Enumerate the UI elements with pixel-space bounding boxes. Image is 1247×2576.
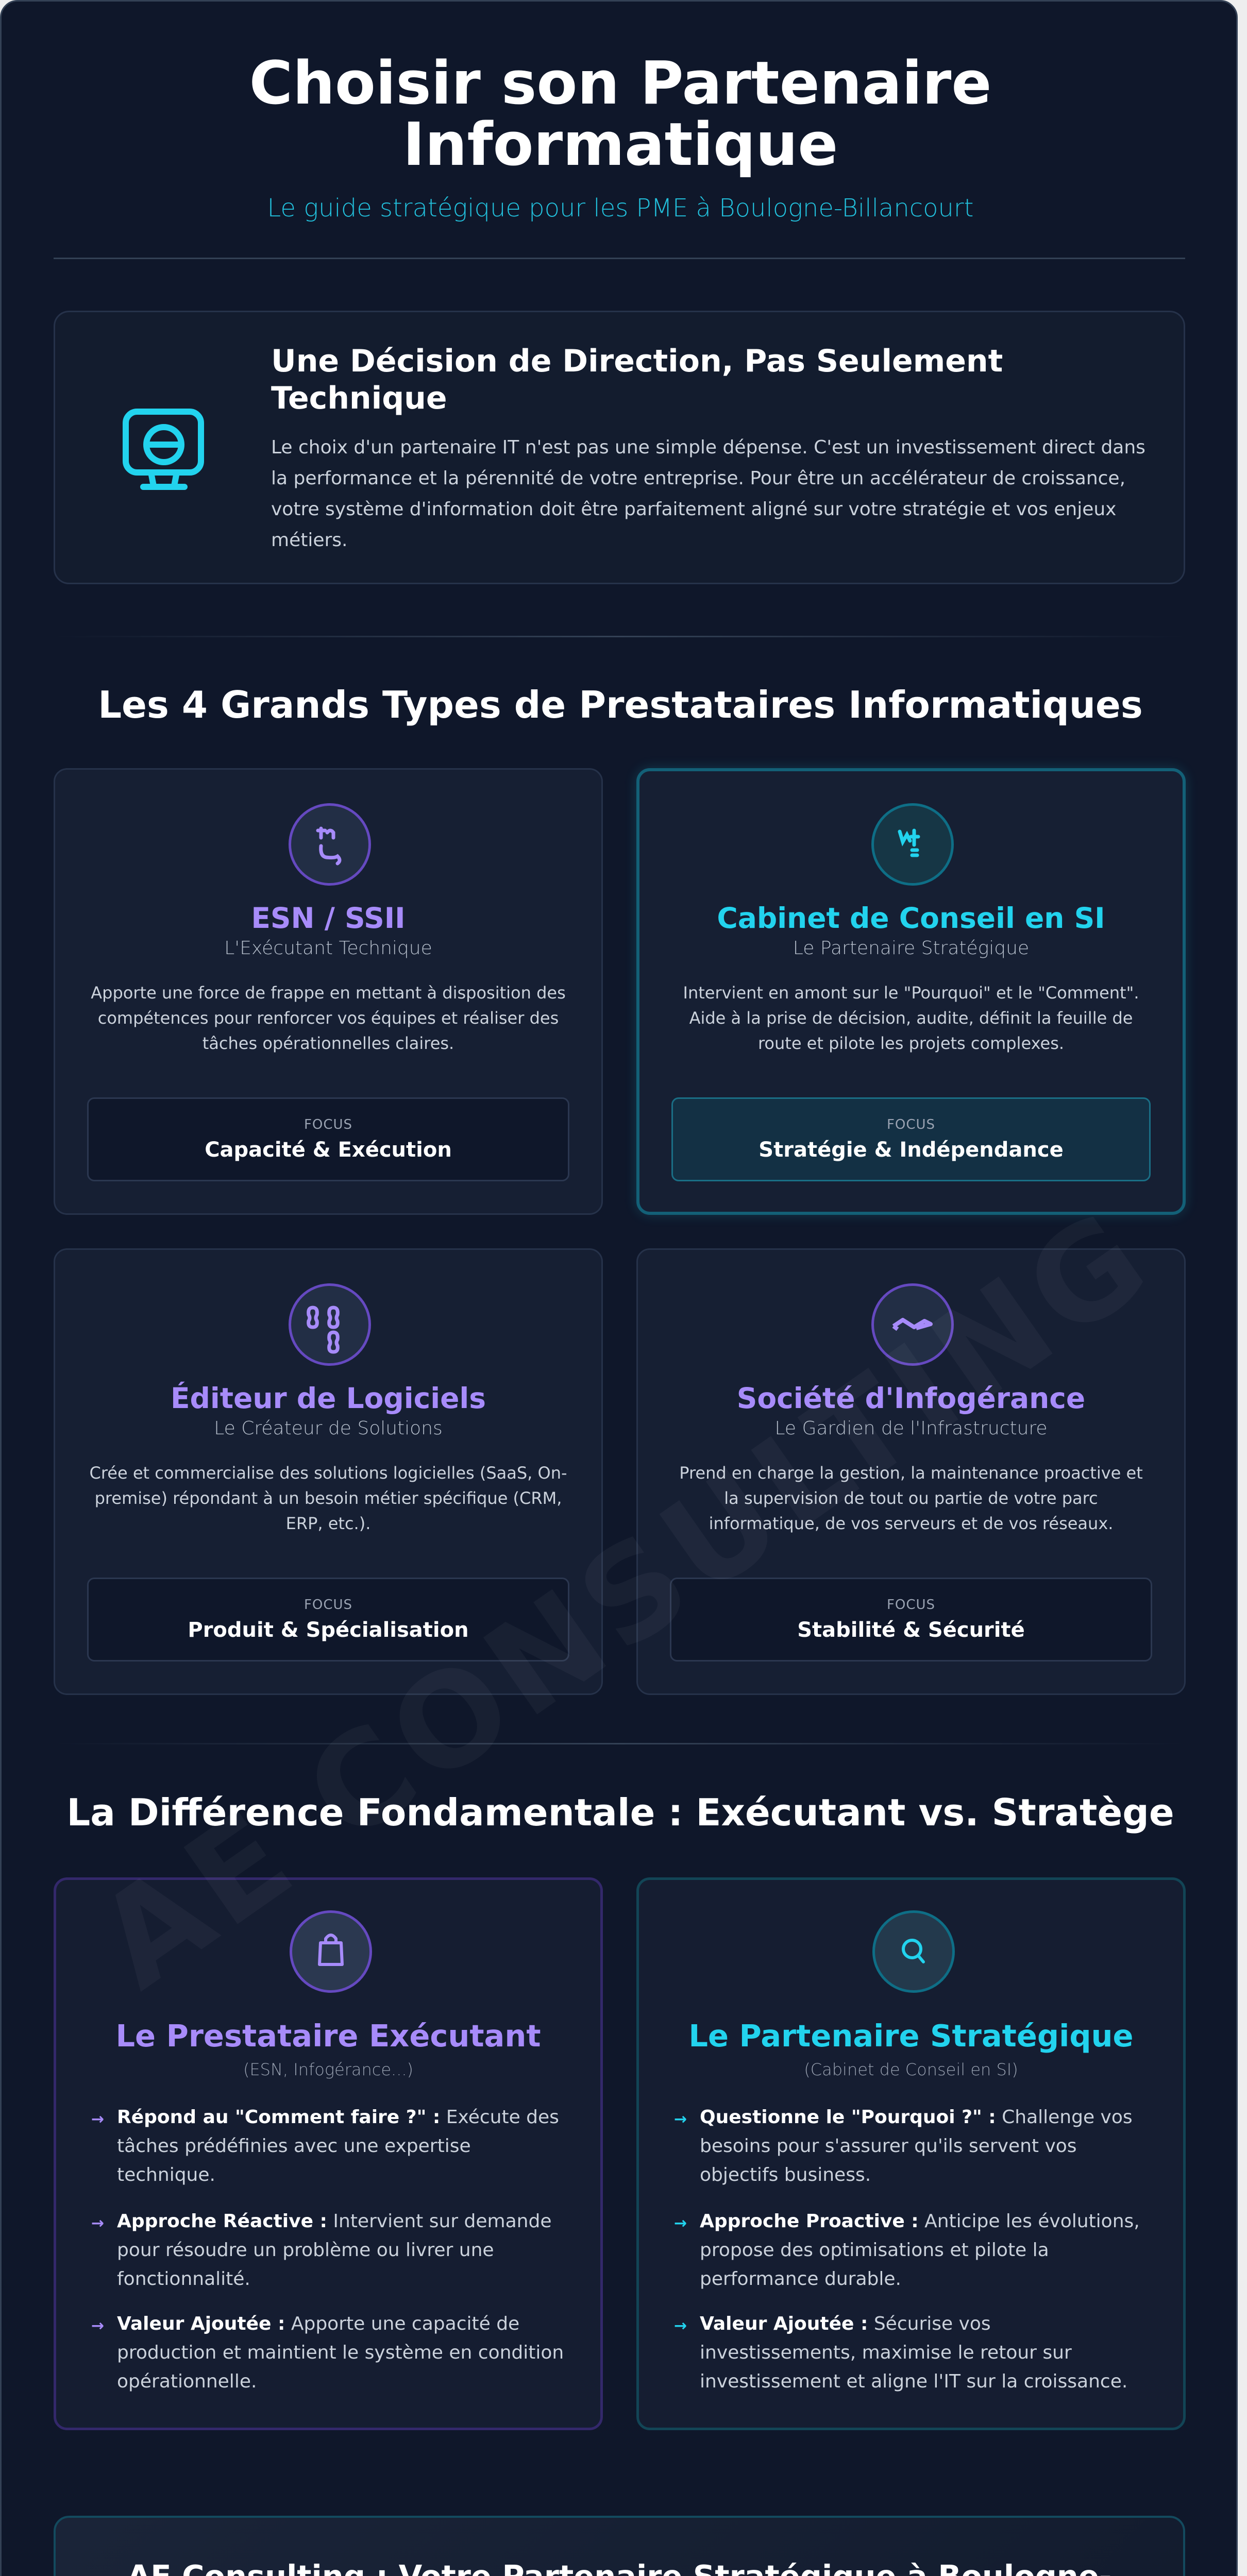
focus box: FOCUS: [887, 1117, 935, 1132]
card: Cabinet de conseil: Cabinet de Conseil en SI: [717, 902, 1105, 935]
focus box: [671, 1097, 1151, 1181]
panel: executant: Le Prestataire Exécutant: [115, 2018, 541, 2054]
subtitle: Le guide stratégique pour les PME à Boulogne-Billancourt: [267, 194, 973, 223]
bullet list: Approche Proactive : Anticipe les évolutions, propose des optimisations et pilote la performance durable.: [700, 2211, 1140, 2290]
focus box: [87, 1578, 569, 1662]
focus box: [670, 1578, 1152, 1662]
card: ESN: Apporte une force de frappe en mettant à disposition des compétences pour renforcer vos équipes et réaliser des tâches opérationnelles claires.: [91, 983, 566, 1053]
card: Infogérance: Le Gardien de l'Infrastructure: [774, 1418, 1048, 1439]
title: Informatique: [403, 110, 838, 179]
bullet list: investissements, maximise le retour sur investissement et aligne l'IT sur la croissance.: [700, 2342, 1127, 2392]
icon: bag: [290, 1910, 372, 1993]
icon: esn: [289, 803, 371, 886]
focus box: Capacité & Exécution: [205, 1138, 452, 1162]
panel: executant: (ESN, Infogérance...): [243, 2060, 413, 2079]
focus box: FOCUS: [304, 1117, 352, 1132]
card: Cabinet de conseil: Intervient en amont sur le "Pourquoi" et le "Comment". Aide à la prise de décision, audite, définit la feuille de route et pilote les projets complexes.: [683, 983, 1139, 1053]
bullet list: →: [674, 2214, 687, 2232]
panel: AE Consulting conclusion: [54, 2516, 1185, 2576]
icon: magnifier: [872, 1910, 955, 1993]
bullet list: →: [91, 2214, 104, 2232]
bullet list: [674, 2107, 1140, 2392]
intro text: Le choix d'un partenaire IT n'est pas une simple dépense. C'est un investissement direct dans la performance et la pérennité de votre entreprise. Pour être un accélérateur de croissance, votre système d'information doit être parfaitement aligné sur votre stratégie et vos enjeux métiers.: [271, 437, 1145, 551]
icon: editeur: [289, 1283, 371, 1366]
bullet list: →: [674, 2110, 687, 2128]
card: Cabinet de conseil: [636, 768, 1186, 1215]
bullet list: Valeur Ajoutée : Sécurise vos: [700, 2313, 991, 2334]
focus box: FOCUS: [887, 1597, 935, 1613]
focus box: Produit & Spécialisation: [188, 1618, 469, 1642]
bullet list: [91, 2107, 564, 2392]
watermark: AE CONSULTING: [72, 1180, 1178, 2017]
focus box: Stratégie & Indépendance: [759, 1138, 1064, 1162]
card: Editeur: [54, 1248, 603, 1695]
card: Infogérance: [636, 1248, 1186, 1695]
card: ESN: ESN / SSII: [251, 902, 406, 935]
icon: conseil: [871, 803, 954, 886]
card: Infogérance: Société d'Infogérance: [737, 1382, 1085, 1415]
bullet list: Répond au "Comment faire ?" : Exécute des tâches prédéfinies avec une expertise technique.: [117, 2107, 559, 2185]
icon: monitor / webcam: [123, 409, 204, 490]
bullet list: →: [674, 2317, 687, 2335]
panel: strategique: [636, 1877, 1186, 2430]
panel: strategique: Le Partenaire Stratégique: [688, 2018, 1134, 2054]
card: ESN: L'Exécutant Technique: [224, 938, 432, 959]
panel: intro: [54, 311, 1185, 584]
title: Choisir son Partenaire: [249, 49, 991, 118]
panel: executant: [54, 1877, 603, 2430]
bullet list: →: [91, 2110, 104, 2128]
bullet list: Approche Réactive : Intervient sur demande pour résoudre un problème ou livrer une fonctionnalité.: [117, 2211, 551, 2290]
focus box: [87, 1097, 569, 1181]
panel: strategique: (Cabinet de Conseil en SI): [804, 2060, 1018, 2079]
card: Cabinet de conseil: Le Partenaire Stratégique: [793, 938, 1029, 959]
card: ESN: [54, 768, 603, 1215]
heading: 4 types: Les 4 Grands Types de Prestataires Informatiques: [98, 683, 1143, 726]
icon: infogerance: [871, 1283, 954, 1366]
card: Editeur: Éditeur de Logiciels: [171, 1382, 486, 1415]
focus box: Stabilité & Sécurité: [797, 1618, 1025, 1642]
card: Infogérance: Prend en charge la gestion, la maintenance proactive et la supervision de tout ou partie de votre parc informatique, de vos serveurs et de vos réseaux.: [679, 1463, 1143, 1533]
title: [249, 49, 991, 179]
bullet list: Valeur Ajoutée : Apporte une capacité de production et maintient le système en condition opérationnelle.: [117, 2313, 564, 2392]
focus box: FOCUS: [304, 1597, 352, 1613]
bullet list: →: [91, 2317, 104, 2335]
bullet list: Questionne le "Pourquoi ?" : Challenge vos besoins pour s'assurer qu'ils servent vos objectifs business.: [700, 2107, 1133, 2185]
card: Editeur: Crée et commercialise des solutions logicielles (SaaS, On-premise) répondant à un besoin métier spécifique (CRM, ERP, etc.).: [89, 1463, 567, 1533]
heading: difference: La Différence Fondamentale : Exécutant vs. Stratège: [66, 1791, 1174, 1834]
intro heading: Une Décision de Direction, Pas Seulement Technique: [271, 343, 1003, 416]
card: Editeur: Le Créateur de Solutions: [214, 1418, 443, 1439]
